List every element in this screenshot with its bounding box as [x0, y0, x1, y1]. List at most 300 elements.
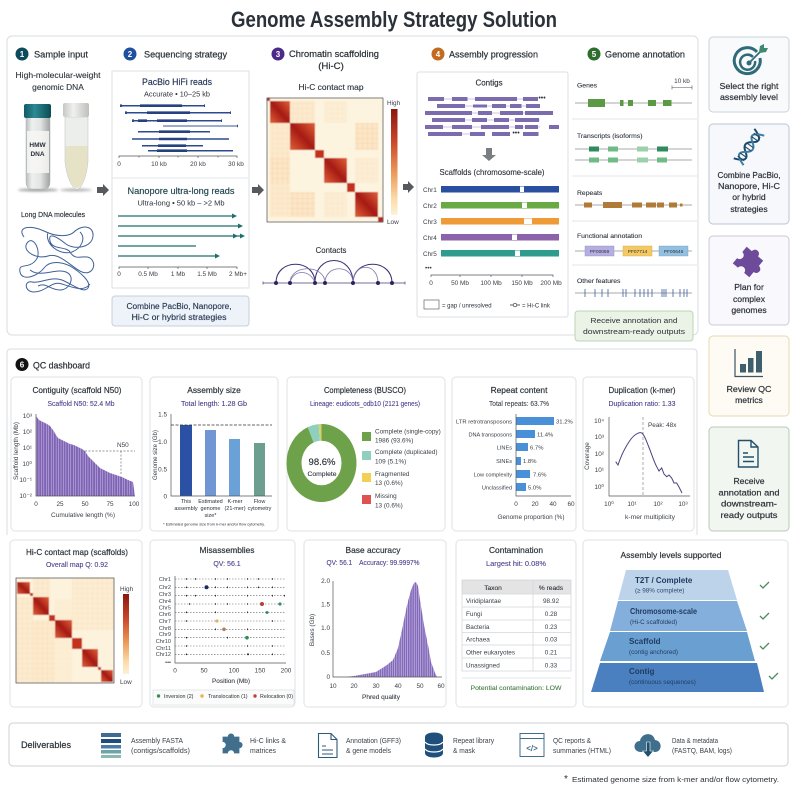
step 2: sequencing strategy: 2	[128, 50, 133, 59]
legend: color bar: High	[120, 586, 134, 593]
card: assembly size	[150, 377, 278, 531]
chart: misassemblies: Chr4	[159, 599, 171, 605]
chart: misassemblies: Chr3	[159, 592, 171, 598]
chart: k-mer spectrum: 10¹	[595, 467, 604, 474]
card: review QC metrics: Review QC	[726, 384, 772, 394]
chart: misassemblies: 0	[173, 668, 177, 674]
chart: size bars: genome	[201, 506, 220, 512]
card: select the right assembly level: Select the right	[720, 81, 779, 91]
chart: misassemblies: Chr10	[156, 639, 171, 645]
table: taxa: Fungi	[466, 611, 482, 618]
chart: k-mer spectrum	[584, 417, 690, 521]
card: misassemblies	[150, 540, 295, 707]
chart: assembly pyramid: Chromosome-scale	[630, 607, 697, 616]
callout: combine strategies: Combine PacBio, Nanopore,	[126, 302, 232, 311]
card: contamination: Contamination	[489, 545, 543, 555]
table: taxa	[462, 580, 571, 671]
chart: k-mer spectrum: 10⁰	[604, 501, 614, 508]
item: QC reports: summaries (HTML)	[553, 746, 611, 755]
icon: tangled DNA	[20, 227, 94, 292]
icon: DNA helix	[734, 129, 764, 165]
card: assembly size: Total length: 1.28 Gb	[181, 401, 247, 408]
item: Hi-C links: matrices	[250, 746, 276, 755]
track: genes: 10 kb	[674, 78, 690, 85]
chart: k-mer spectrum: Coverage	[584, 442, 591, 470]
card: complex genomes: complex	[733, 294, 766, 304]
card: Hi-C contact map scaffolds	[10, 540, 142, 707]
chart: scaffolds: 50 Mb	[451, 280, 469, 287]
table: taxa: 0.28	[545, 611, 558, 618]
step 2: sequencing strategy: Sequencing strategy	[144, 50, 227, 60]
chart: misassemblies: Position (Mb)	[212, 678, 250, 685]
chart: repeats: 6.7%	[530, 446, 544, 452]
chart: HiFi reads: 0	[117, 161, 121, 168]
arrow	[252, 184, 264, 196]
legend: color bar	[387, 100, 401, 226]
chart: contact arcs	[263, 260, 405, 284]
label: long DNA molecules: Long DNA molecules	[21, 212, 85, 219]
arrow	[403, 181, 414, 193]
chart: scaffolds: Chr3	[423, 219, 437, 226]
card: combine strategies: strategies	[730, 204, 768, 214]
step 4: assembly progression: 4	[436, 50, 441, 59]
callout: receive annotation	[575, 311, 693, 341]
step 3: chromatin scaffolding: 3	[276, 50, 281, 59]
chart: assembly pyramid: T2T / Complete	[635, 576, 693, 585]
step 4: assembly progression	[417, 48, 568, 317]
item: Hi-C links	[223, 733, 286, 755]
card: review QC metrics: metrics	[735, 395, 763, 405]
chart: misassemblies: Chr8	[159, 626, 171, 632]
table: taxa: Archaea	[466, 636, 490, 644]
chart: phred histogram: 40	[394, 683, 402, 690]
chart: repeats: 7.6%	[533, 472, 547, 478]
heading: Nanopore: Nanopore ultra-long reads	[128, 185, 235, 196]
heading: deliverables: Deliverables	[21, 740, 71, 751]
text: scaffolds heading: Scaffolds (chromosome-scale)	[440, 168, 545, 177]
chart: k-mer spectrum: k-mer multiplicity	[625, 514, 676, 521]
table: taxa: Other eukaryotes	[466, 650, 515, 656]
chart: assembly pyramid: Contig	[629, 667, 654, 676]
chart: phred histogram: Bases (Gb)	[309, 614, 316, 646]
chart: scaffolds: Chr1	[423, 187, 437, 194]
card: receive annotation: annotation and	[718, 488, 780, 498]
chart: N50: Cumulative length (%)	[51, 512, 115, 519]
panel: workflow	[7, 36, 698, 335]
card: assembly size: Assembly size	[187, 385, 241, 395]
track: genes	[575, 78, 692, 107]
chart: misassemblies: •••	[165, 660, 171, 666]
item: Hi-C links: Hi-C links &	[250, 736, 286, 745]
card: select the right assembly level: assembly level	[720, 92, 778, 102]
step 4: assembly progression: Assembly progression	[449, 50, 538, 60]
chart: size bars: cytometry	[248, 506, 272, 512]
track: functional annotation: PF00646	[664, 249, 684, 255]
card: misassemblies: Misassemblies	[200, 545, 254, 555]
icon: HMW DNA tube: HMW	[29, 142, 46, 149]
chart: misassemblies: Chr1	[159, 577, 171, 583]
step 1: sample input: 1	[20, 50, 25, 59]
card: repeat content	[452, 377, 576, 531]
chart: k-mer spectrum: 10³	[678, 501, 688, 508]
chart: size bars: 1.0	[158, 439, 167, 446]
track: transcripts	[575, 133, 692, 162]
callout: combine strategies	[112, 296, 249, 326]
icon: bar chart	[735, 349, 763, 376]
card: repeat content: Total repeats: 63.7%	[489, 401, 549, 408]
chart: k-mer spectrum: 10⁴	[594, 418, 604, 425]
chart: N50: 0	[34, 501, 38, 508]
table: taxa: 0.21	[545, 650, 558, 656]
chart: phred histogram: 1.5	[321, 602, 330, 608]
card: assembly levels: Assembly levels supported	[620, 550, 722, 560]
icons: check marks	[760, 582, 778, 679]
step 5: genome annotation	[572, 48, 697, 297]
chart: size bars: 0.5	[158, 466, 167, 474]
card: complex genomes: genomes	[731, 305, 767, 315]
chart: Hi-C contact map	[267, 98, 383, 222]
legend: misassembly types: Inversion (2)	[164, 694, 194, 700]
chart: repeats: 60	[567, 501, 575, 508]
legend: color bar	[120, 586, 134, 686]
card: Hi-C contact map scaffolds: Hi-C contact map (scaffolds)	[26, 547, 128, 557]
step 1: sample input: genomic DNA	[32, 82, 84, 92]
icon: puzzle	[733, 244, 769, 280]
table: taxa: 0.03	[545, 636, 558, 644]
chart: repeats: Unclassified	[482, 486, 512, 492]
chart: misassemblies: 200	[281, 668, 292, 674]
table: taxa: 0.23	[545, 624, 558, 631]
chart: HiFi reads	[117, 106, 244, 168]
chart: scaffolds: Chr5	[423, 251, 437, 258]
chart: size bars	[152, 412, 272, 526]
chart: N50: 100	[129, 501, 140, 508]
chart: size bars: (21-mer)	[224, 506, 246, 512]
chart: scaffolds: Chr2	[423, 203, 437, 210]
chart: scaffolds: •••	[425, 265, 432, 272]
heading: PacBio: PacBio HiFi reads	[142, 76, 212, 87]
step 1: sample input: Sample input	[34, 50, 88, 60]
icon: HMW DNA tube: DNA	[30, 151, 45, 158]
track: repeats	[575, 190, 692, 208]
chart: repeats: Low complexity	[474, 472, 512, 478]
chart: N50: 10⁻²	[19, 493, 32, 500]
legend: BUSCO: Complete (single-copy)	[375, 428, 441, 436]
chart: misassemblies: Chr2	[159, 585, 171, 591]
item: repeat library: & mask	[453, 746, 475, 755]
chart: HiFi reads: 10 kb	[151, 161, 167, 168]
chart: misassemblies: Chr9	[159, 632, 171, 638]
chart: repeats: 11.4%	[537, 432, 554, 438]
chart: k-mer spectrum: 10¹	[627, 501, 637, 508]
chart: repeats: Genome proportion (%)	[498, 514, 564, 521]
chart: size bars: Genome size (Gb)	[152, 430, 159, 480]
chart: repeats: 20	[531, 501, 539, 508]
card: misassemblies: QV: 56.1	[213, 561, 241, 568]
panel: QC dashboard	[7, 349, 697, 535]
card: receive annotation: ready outputs	[720, 510, 778, 520]
legend: BUSCO	[362, 428, 441, 510]
card: duplication: Duplication ratio: 1.33	[608, 401, 676, 408]
chart: Nanopore reads	[117, 214, 247, 278]
chart: size bars: This	[181, 499, 191, 505]
card: base accuracy: Base accuracy	[346, 545, 401, 555]
track: functional annotation: PF00069	[590, 249, 610, 255]
item: QC reports	[520, 734, 611, 756]
arrow: down	[482, 148, 496, 161]
chart: N50: N50	[117, 442, 129, 449]
card: repeat content: Repeat content	[491, 385, 548, 395]
step 1: sample input	[16, 48, 101, 292]
card: BUSCO completeness: Completeness (BUSCO)	[324, 385, 406, 395]
text: contigs heading: Contigs	[475, 78, 503, 88]
table: taxa: Taxon	[484, 585, 502, 592]
text: contamination verdict: Potential contamination: LOW	[470, 685, 562, 692]
item: repeat library: Repeat library	[453, 736, 494, 745]
item: assembly FASTA	[101, 733, 190, 758]
item: repeat library	[425, 732, 494, 758]
chart: scaffold contact map	[16, 578, 114, 683]
chart: repeats: 40	[549, 501, 557, 508]
card: contamination: Largest hit: 0.08%	[486, 561, 546, 568]
card: receive annotation	[709, 427, 789, 531]
chart: donut	[294, 432, 349, 494]
callout: combine strategies: Hi-C or hybrid strategies	[132, 313, 226, 322]
title: Genome Assembly Strategy Solution	[231, 7, 557, 32]
card: base accuracy: QV: 56.1 Accuracy: 99.9997%	[326, 560, 420, 567]
card: base accuracy	[304, 540, 446, 707]
chart: phred histogram: Phred quality	[362, 694, 401, 701]
track: genes: Genes	[577, 82, 598, 90]
step 5: genome annotation: Genome annotation	[605, 50, 685, 60]
legend: gap and link	[424, 300, 551, 310]
text: Nanopore subtitle: Ultra-long • 50 kb – >2 Mb	[138, 200, 225, 208]
chart: contigs	[425, 95, 559, 137]
step 2: sequencing strategy	[112, 48, 249, 326]
chart: size bars: size*	[205, 513, 217, 519]
legend: misassembly types	[153, 690, 294, 705]
heading: QC dashboard: QC dashboard	[33, 360, 90, 372]
legend: color bar: High	[387, 100, 401, 107]
chart: size bars: 0	[163, 494, 167, 500]
callout: receive annotation: Receive annotation and	[590, 316, 678, 325]
card: complex genomes	[709, 236, 789, 325]
chart: Nanopore reads: 2 Mb+	[229, 271, 247, 278]
chart: k-mer spectrum: 10³	[595, 434, 604, 441]
track: transcripts: Transcripts (isoforms)	[577, 133, 642, 140]
chart: assembly pyramid	[591, 570, 764, 692]
chart: N50	[13, 413, 140, 519]
chart: phred histogram: 60	[437, 683, 445, 690]
step 1: sample input: High-molecular-weight	[16, 70, 101, 80]
legend: BUSCO: 109 (5.1%)	[375, 458, 406, 466]
callout: receive annotation: downstream-ready outputs	[583, 327, 685, 336]
chart: repeats: LTR retrotransposons	[456, 420, 512, 426]
chart: size bars: * Estimated genome size from k-mer and/or flow cytometry.	[163, 522, 265, 526]
chart: size bars: K-mer	[228, 499, 243, 505]
table: taxa: Unassigned	[466, 662, 500, 670]
legend: BUSCO: Fragmented	[375, 471, 410, 478]
chart: phred histogram: 0	[326, 674, 330, 681]
chart: contigs: •••	[538, 95, 546, 102]
chart: N50: 10¹	[23, 445, 32, 452]
chart: repeats	[456, 414, 575, 521]
item: QC reports: </>	[526, 744, 538, 753]
chart: k-mer spectrum: Peak: 48x	[648, 422, 677, 429]
item: annotation: & gene models	[346, 746, 391, 755]
legend: BUSCO: Missing	[375, 493, 397, 500]
table: taxa: 0.33	[545, 662, 558, 670]
chart: k-mer spectrum: 10²	[653, 501, 663, 508]
chart: repeats: LINEs	[497, 446, 512, 452]
chart: N50: 10⁰	[22, 461, 32, 468]
chart: phred histogram: 30	[372, 683, 380, 690]
chart: N50: 10⁻¹	[19, 477, 32, 484]
footnote: Estimated genome size from k-mer and/or flow cytometry.	[572, 775, 779, 784]
table: taxa: Viridiplantae	[466, 598, 502, 605]
track: functional annotation: PF07714	[628, 249, 648, 255]
chart: assembly pyramid: (continuous sequences)	[629, 679, 696, 686]
card: combine strategies: Combine PacBio,	[718, 170, 780, 180]
chart: phred histogram: 50	[416, 683, 424, 690]
step 3: chromatin scaffolding: (Hi-C)	[318, 61, 344, 72]
icon: target	[734, 44, 768, 74]
legend: misassembly types: Translocation (1)	[208, 694, 248, 700]
chart: Nanopore reads: 0.5 Mb	[138, 271, 158, 278]
chart: N50: 10³	[23, 413, 32, 420]
step 3: chromatin scaffolding: Chromatin scaffolding	[289, 49, 379, 60]
arrow	[97, 184, 109, 196]
card: contamination	[456, 540, 576, 707]
item: assembly FASTA: Assembly FASTA	[131, 736, 183, 745]
chart: phred histogram: 10	[329, 683, 337, 690]
chart: scaffolds: 100 Mb	[480, 280, 502, 287]
chart: misassemblies	[156, 576, 292, 685]
chart: assembly pyramid: (≥ 98% complete)	[635, 588, 684, 594]
chart: phred histogram: 20	[350, 683, 358, 690]
table: taxa: % reads	[539, 585, 564, 592]
legend: gap and link: = gap / unresolved	[442, 304, 492, 310]
chart: misassemblies: 50	[200, 668, 208, 674]
icon: sample tube	[60, 103, 92, 191]
card: select the right assembly level	[709, 37, 789, 112]
chart: size bars: Flow	[254, 499, 265, 505]
chart: donut: 98.6%	[309, 457, 336, 468]
chart: size bars: 1.5	[158, 412, 167, 418]
step 3: chromatin scaffolding	[263, 48, 405, 284]
card: combine strategies	[709, 124, 789, 224]
chart: misassemblies: Chr5	[159, 606, 171, 612]
card: BUSCO completeness: Lineage: eudicots_odb10 (2121 genes)	[310, 401, 420, 408]
item: annotation: Annotation (GFF3)	[346, 736, 401, 745]
card: contiguity: Scaffold N50: 52.4 Mb	[48, 401, 115, 408]
chart: donut: Complete	[307, 471, 337, 478]
chart: repeats: DNA transposons	[468, 432, 512, 438]
card: contiguity	[11, 377, 142, 531]
card: combine strategies: Nanopore, Hi-C	[718, 181, 780, 191]
legend: BUSCO: 13 (0.6%)	[375, 480, 403, 487]
chart: scaffolds	[423, 186, 562, 287]
card: BUSCO completeness	[287, 377, 445, 531]
track: functional annotation	[575, 233, 692, 256]
icon: document	[738, 440, 758, 467]
chart: repeats: 5.0%	[528, 486, 542, 492]
panel: progression	[417, 72, 568, 317]
legend: misassembly types: Relocation (0)	[260, 694, 293, 700]
text: PacBio subtitle: Accurate • 10–25 kb	[144, 92, 210, 98]
item: data and metadata: (FASTQ, BAM, logs)	[672, 746, 732, 755]
item: QC reports: QC reports &	[553, 736, 591, 745]
chart: repeats: 0	[514, 501, 518, 508]
panel: deliverables	[9, 723, 788, 766]
chart: phred histogram	[309, 578, 445, 701]
card: duplication	[583, 377, 694, 531]
chart: scaffolds: 0	[429, 280, 433, 287]
chart: Nanopore reads: 0	[117, 271, 121, 278]
track: other features	[575, 278, 692, 297]
chart: repeats: SINEs	[496, 459, 512, 465]
text: contacts title: Contacts	[316, 246, 346, 255]
chart: misassemblies: Chr6	[159, 612, 171, 618]
card: complex genomes: Plan for	[734, 282, 764, 292]
card: review QC metrics	[709, 336, 789, 416]
text: contact map title: Hi-C contact map	[298, 83, 364, 92]
chart: assembly pyramid: (Hi-C scaffolded)	[630, 619, 677, 626]
item: annotation	[318, 734, 401, 758]
item: assembly FASTA: (contigs/scaffolds)	[131, 746, 190, 755]
chart: misassemblies: Chr7	[159, 619, 171, 625]
track: other features: Other features	[577, 278, 621, 285]
icon: HMW DNA tube	[18, 104, 58, 192]
chart: repeats: 1.8%	[523, 459, 537, 465]
legend: gap and link: = Hi-C link	[522, 304, 551, 310]
chart: repeats: 31.2%	[556, 420, 573, 426]
chart: contigs: •••	[512, 130, 520, 137]
legend: BUSCO: 1986 (93.6%)	[375, 438, 413, 444]
chart: scaffolds: Chr4	[423, 235, 437, 242]
chart: scaffolds: 200 Mb	[540, 280, 562, 287]
card: receive annotation: Receive	[733, 476, 765, 486]
footnote: *	[564, 774, 568, 785]
legend: BUSCO: Complete (duplicated)	[375, 449, 438, 456]
chart: phred histogram: 2.0	[321, 578, 330, 585]
chart: N50: 50	[81, 501, 89, 508]
chart: assembly pyramid: (contig anchored)	[629, 649, 678, 656]
track: functional annotation: Functional annotation	[577, 233, 642, 240]
card: contiguity: Contiguity (scaffold N50)	[32, 385, 122, 395]
chart: Nanopore reads: 1 Mb	[171, 271, 186, 278]
legend: color bar: Low	[120, 679, 132, 686]
card: combine strategies: or hybrid	[732, 192, 766, 202]
heading: QC dashboard	[16, 358, 90, 372]
chart: phred histogram: 0.5	[321, 650, 330, 657]
chart: Nanopore reads: 1.5 Mb	[197, 271, 217, 278]
chart: misassemblies: 100	[229, 668, 240, 674]
item: data and metadata: Data & metadata	[672, 736, 719, 745]
panel: reads	[112, 71, 249, 288]
legend: color bar: Low	[387, 219, 399, 226]
item: data and metadata	[634, 734, 732, 758]
chart: HiFi reads: 20 kb	[190, 161, 206, 168]
chart: misassemblies: Chr12	[156, 652, 171, 658]
chart: N50: 25	[56, 501, 64, 508]
chart: size bars: Estimated	[198, 499, 223, 505]
chart: phred histogram: 1.0	[321, 625, 330, 632]
heading: QC dashboard: 6	[20, 360, 25, 370]
card: duplication: Duplication (k-mer)	[608, 385, 676, 395]
chart: k-mer spectrum: 10⁰	[594, 484, 604, 491]
legend: BUSCO: 13 (0.6%)	[375, 502, 403, 510]
